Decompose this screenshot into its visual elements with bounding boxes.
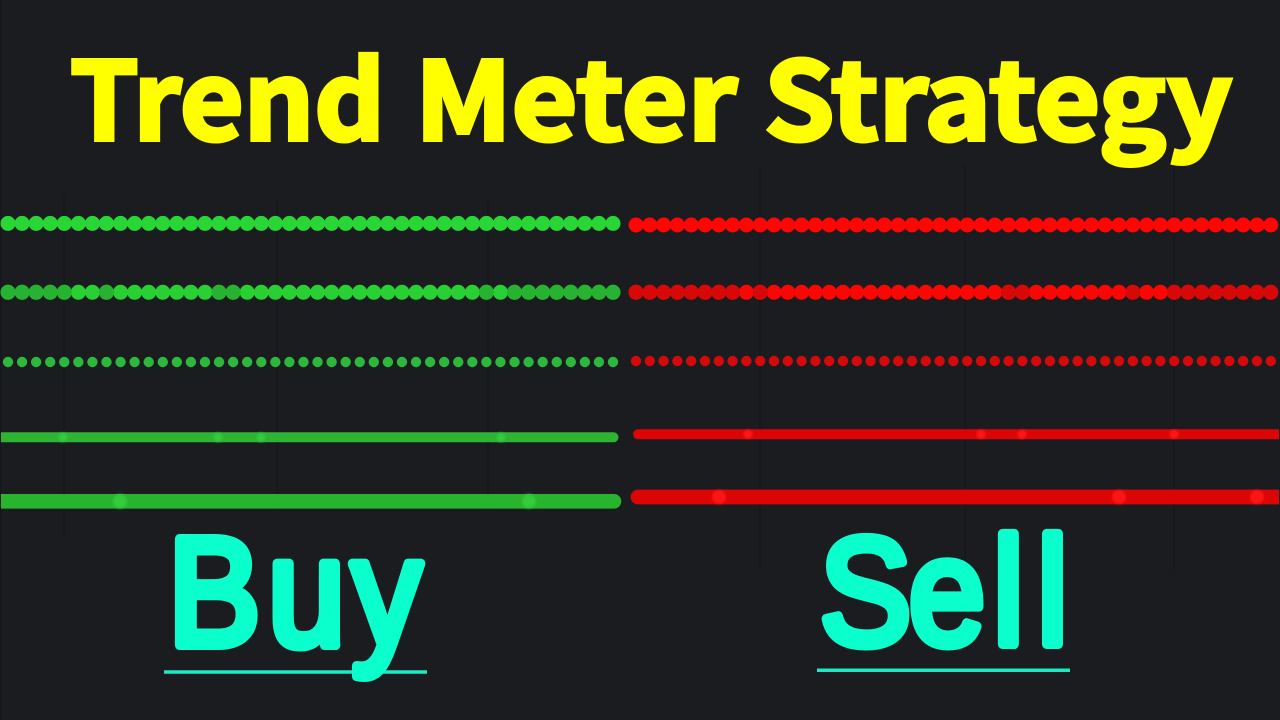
panel: sell signals (628, 225, 1279, 504)
label: buy: Buy (168, 506, 421, 679)
panel: buy signals (0, 223, 621, 509)
row: red small dots (636, 356, 1272, 366)
row: red mixed dots (628, 285, 1278, 300)
row: green small dots (8, 357, 615, 367)
row: green large dots (8, 216, 615, 231)
row: red large dots (636, 218, 1272, 232)
line: green thick (1, 494, 621, 509)
title: Meter (415, 16, 738, 172)
title (70, 16, 1232, 172)
line: red thick (631, 490, 1279, 504)
title: Strategy (764, 16, 1232, 172)
line: red thin (633, 429, 1279, 439)
label: sell: Sell (820, 506, 1068, 677)
row: green mixed dots (0, 285, 620, 300)
title: Trend (70, 16, 385, 172)
line: green thin (1, 432, 618, 442)
